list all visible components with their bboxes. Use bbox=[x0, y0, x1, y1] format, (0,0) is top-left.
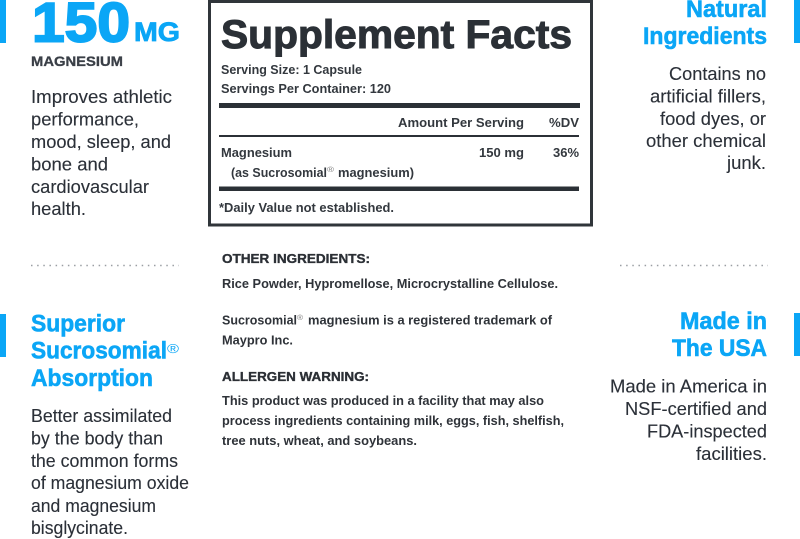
nutrient row: magnesium bbox=[221, 145, 579, 180]
allergen text: tree nuts, wheat, and soybeans. bbox=[222, 433, 417, 448]
body text: absorption: Better assimilated bbox=[31, 406, 172, 426]
body text: natural ingredients: food dyes, or bbox=[660, 109, 766, 129]
panel: natural ingredients bbox=[643, 0, 800, 173]
allergen text: process ingredients containing milk, eggs, fish, shelfish, bbox=[222, 413, 564, 428]
panel: other ingredients and allergen warning bbox=[222, 251, 564, 448]
subheading: magnesium: MAGNESIUM bbox=[31, 53, 123, 69]
stat: 150 mg bbox=[32, 0, 180, 54]
heading: made in the USA: The USA bbox=[672, 335, 767, 362]
panel: supplement facts label bbox=[210, 2, 592, 225]
accent bar: lower left bbox=[0, 314, 6, 357]
nutrient row: magnesium: magnesium) bbox=[338, 165, 414, 180]
heading: superior sucrosomial absorption: Sucrosomial bbox=[31, 338, 167, 364]
footnote: *Daily Value not established. bbox=[219, 200, 394, 215]
nutrient row: magnesium: 36% bbox=[553, 145, 579, 160]
accent bar: top left bbox=[0, 0, 6, 43]
body text: absorption: of magnesium oxide bbox=[31, 473, 189, 493]
accent bar: lower right bbox=[794, 313, 800, 356]
nutrient row: magnesium: (as Sucrosomial bbox=[231, 165, 327, 180]
stat: 150 mg: MG bbox=[134, 17, 180, 47]
body text: made in the USA: NSF-certified and bbox=[625, 399, 767, 419]
trademark note: Sucrosomial bbox=[222, 312, 297, 328]
column headers: Amount Per Serving bbox=[398, 115, 524, 130]
body text: benefits: cardiovascular bbox=[31, 177, 149, 197]
label border bbox=[210, 2, 592, 225]
heading: natural ingredients: Ingredients bbox=[643, 23, 767, 50]
panel: superior sucrosomial absorption bbox=[0, 310, 189, 538]
thick rule: top bbox=[219, 103, 580, 108]
accent bar: top right bbox=[794, 0, 800, 43]
heading: made in the USA: Made in bbox=[680, 308, 767, 335]
nutrient row: magnesium: ® bbox=[327, 166, 335, 174]
heading: superior sucrosomial absorption: ® bbox=[167, 341, 180, 356]
body text: made in the USA bbox=[610, 376, 767, 464]
heading: superior sucrosomial absorption: Superior bbox=[31, 310, 125, 338]
body text: made in the USA: FDA-inspected bbox=[647, 422, 767, 442]
ingredient list: Rice Powder, Hypromellose, Microcrystalline Cellulose. bbox=[222, 276, 558, 291]
panel: 150 mg magnesium bbox=[0, 0, 180, 219]
label title: Supplement Facts bbox=[221, 13, 572, 57]
trademark note: ® bbox=[297, 314, 304, 322]
body text: benefits: mood, sleep, and bbox=[31, 132, 171, 152]
nutrient row: magnesium: Magnesium bbox=[221, 145, 292, 160]
panel: made in the USA bbox=[610, 308, 800, 464]
thick rule: bottom bbox=[219, 186, 579, 191]
trademark note: Maypro Inc. bbox=[222, 332, 293, 348]
heading: allergen warning: ALLERGEN WARNING: bbox=[222, 369, 369, 384]
body text: absorption: and magnesium bbox=[31, 496, 156, 516]
heading: other ingredients: OTHER INGREDIENTS: bbox=[222, 251, 370, 266]
body text: natural ingredients bbox=[646, 64, 766, 173]
body text: benefits: Improves athletic bbox=[31, 87, 172, 107]
body text: made in the USA: facilities. bbox=[696, 444, 767, 464]
allergen text bbox=[222, 393, 564, 448]
body text: absorption: the common forms bbox=[31, 451, 178, 471]
heading: natural ingredients bbox=[643, 0, 767, 50]
thin rule bbox=[219, 135, 579, 137]
body text: absorption bbox=[31, 406, 189, 538]
body text: natural ingredients: Contains no bbox=[669, 64, 766, 84]
serving information: Servings Per Container: 120 bbox=[221, 81, 391, 96]
column headers bbox=[398, 115, 579, 130]
heading: made in the USA bbox=[672, 308, 767, 362]
trademark note: magnesium is a registered trademark of bbox=[308, 312, 553, 328]
body text: benefits: bone and bbox=[31, 154, 108, 174]
nutrient row: magnesium: 150 mg bbox=[479, 145, 524, 160]
heading: superior sucrosomial absorption bbox=[31, 310, 180, 392]
serving information bbox=[221, 62, 391, 96]
body text: natural ingredients: junk. bbox=[726, 153, 766, 173]
trademark note bbox=[222, 312, 553, 348]
body text: made in the USA: Made in America in bbox=[610, 376, 767, 396]
allergen text: This product was produced in a facility that may also bbox=[222, 393, 544, 408]
body text: natural ingredients: other chemical bbox=[646, 131, 766, 151]
body text: benefits: health. bbox=[31, 199, 86, 219]
body text: benefits: performance, bbox=[31, 110, 139, 130]
body text: absorption: by the body than bbox=[31, 428, 163, 448]
heading: superior sucrosomial absorption: Absorption bbox=[31, 365, 153, 392]
body text: absorption: bisglycinate. bbox=[31, 518, 128, 538]
body text: benefits bbox=[31, 87, 172, 219]
serving information: Serving Size: 1 Capsule bbox=[221, 62, 362, 77]
body text: natural ingredients: artificial fillers, bbox=[650, 86, 766, 106]
column headers: %DV bbox=[549, 115, 579, 130]
